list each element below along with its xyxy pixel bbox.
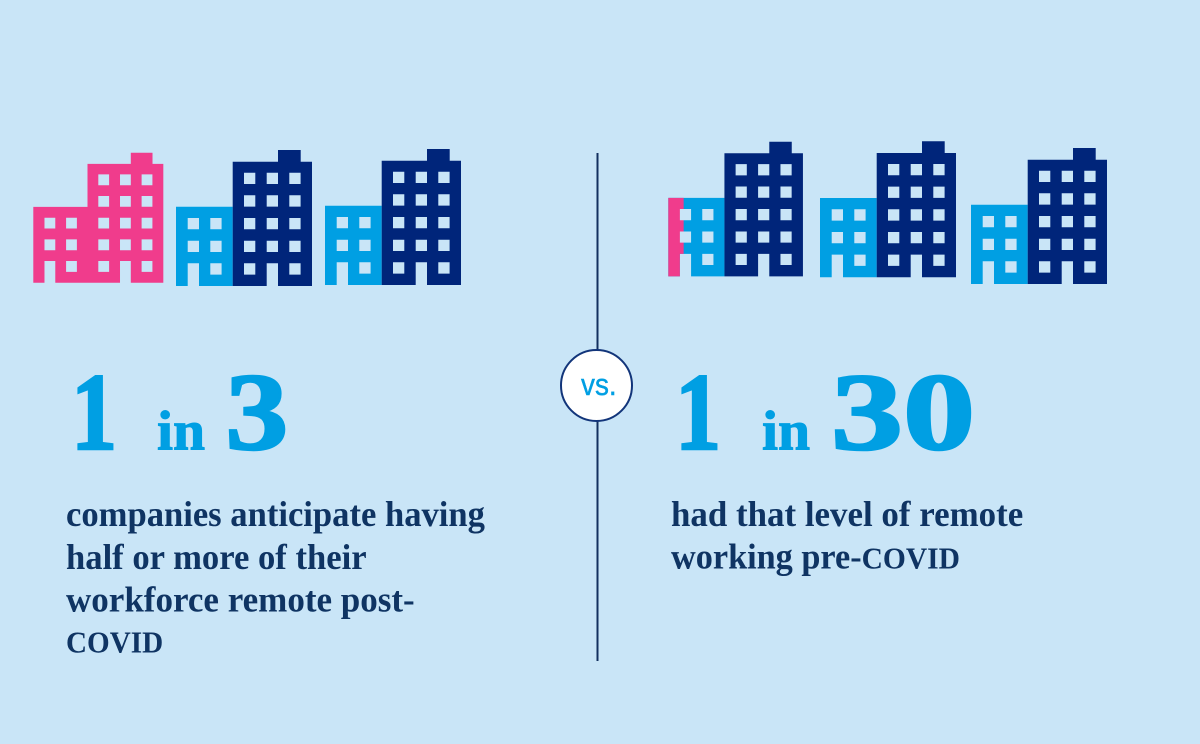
icon: pink building xyxy=(33,153,163,283)
text: left description: workforce remote post- xyxy=(66,579,415,620)
statistic: 1 in 30: in xyxy=(762,400,810,462)
divider with vs. badge: vs. xyxy=(581,368,617,402)
icon: partly pink building xyxy=(668,142,803,276)
statistic: 1 in 30 xyxy=(675,350,975,473)
statistic: 1 in 30: 1 xyxy=(675,350,721,473)
statistic: 1 in 3 xyxy=(71,350,288,473)
text: left description: half or more of their xyxy=(66,537,367,577)
text: right description: had that level of remote xyxy=(671,494,1023,534)
panel: right, 1 in 30 xyxy=(668,141,1107,577)
icon: blue building 6 xyxy=(971,148,1107,284)
statistic: 1 in 3: in xyxy=(157,400,205,462)
statistic: 1 in 3: 1 xyxy=(71,350,117,473)
panel: left, 1 in 3 xyxy=(33,149,485,660)
icon: blue building 5 xyxy=(820,141,956,277)
icon: blue building 2 xyxy=(176,150,312,286)
text: left description: COVID xyxy=(66,625,163,660)
text: left description: companies anticipate having xyxy=(66,494,485,534)
text: right description: working pre-COVID xyxy=(671,537,960,577)
icon: blue building 3 xyxy=(325,149,461,285)
statistic: 1 in 3: 3 xyxy=(226,351,288,473)
statistic: 1 in 30: 30 xyxy=(831,351,975,473)
divider with vs. badge xyxy=(561,153,632,661)
text: left description xyxy=(66,494,485,660)
text: right description xyxy=(671,494,1023,577)
